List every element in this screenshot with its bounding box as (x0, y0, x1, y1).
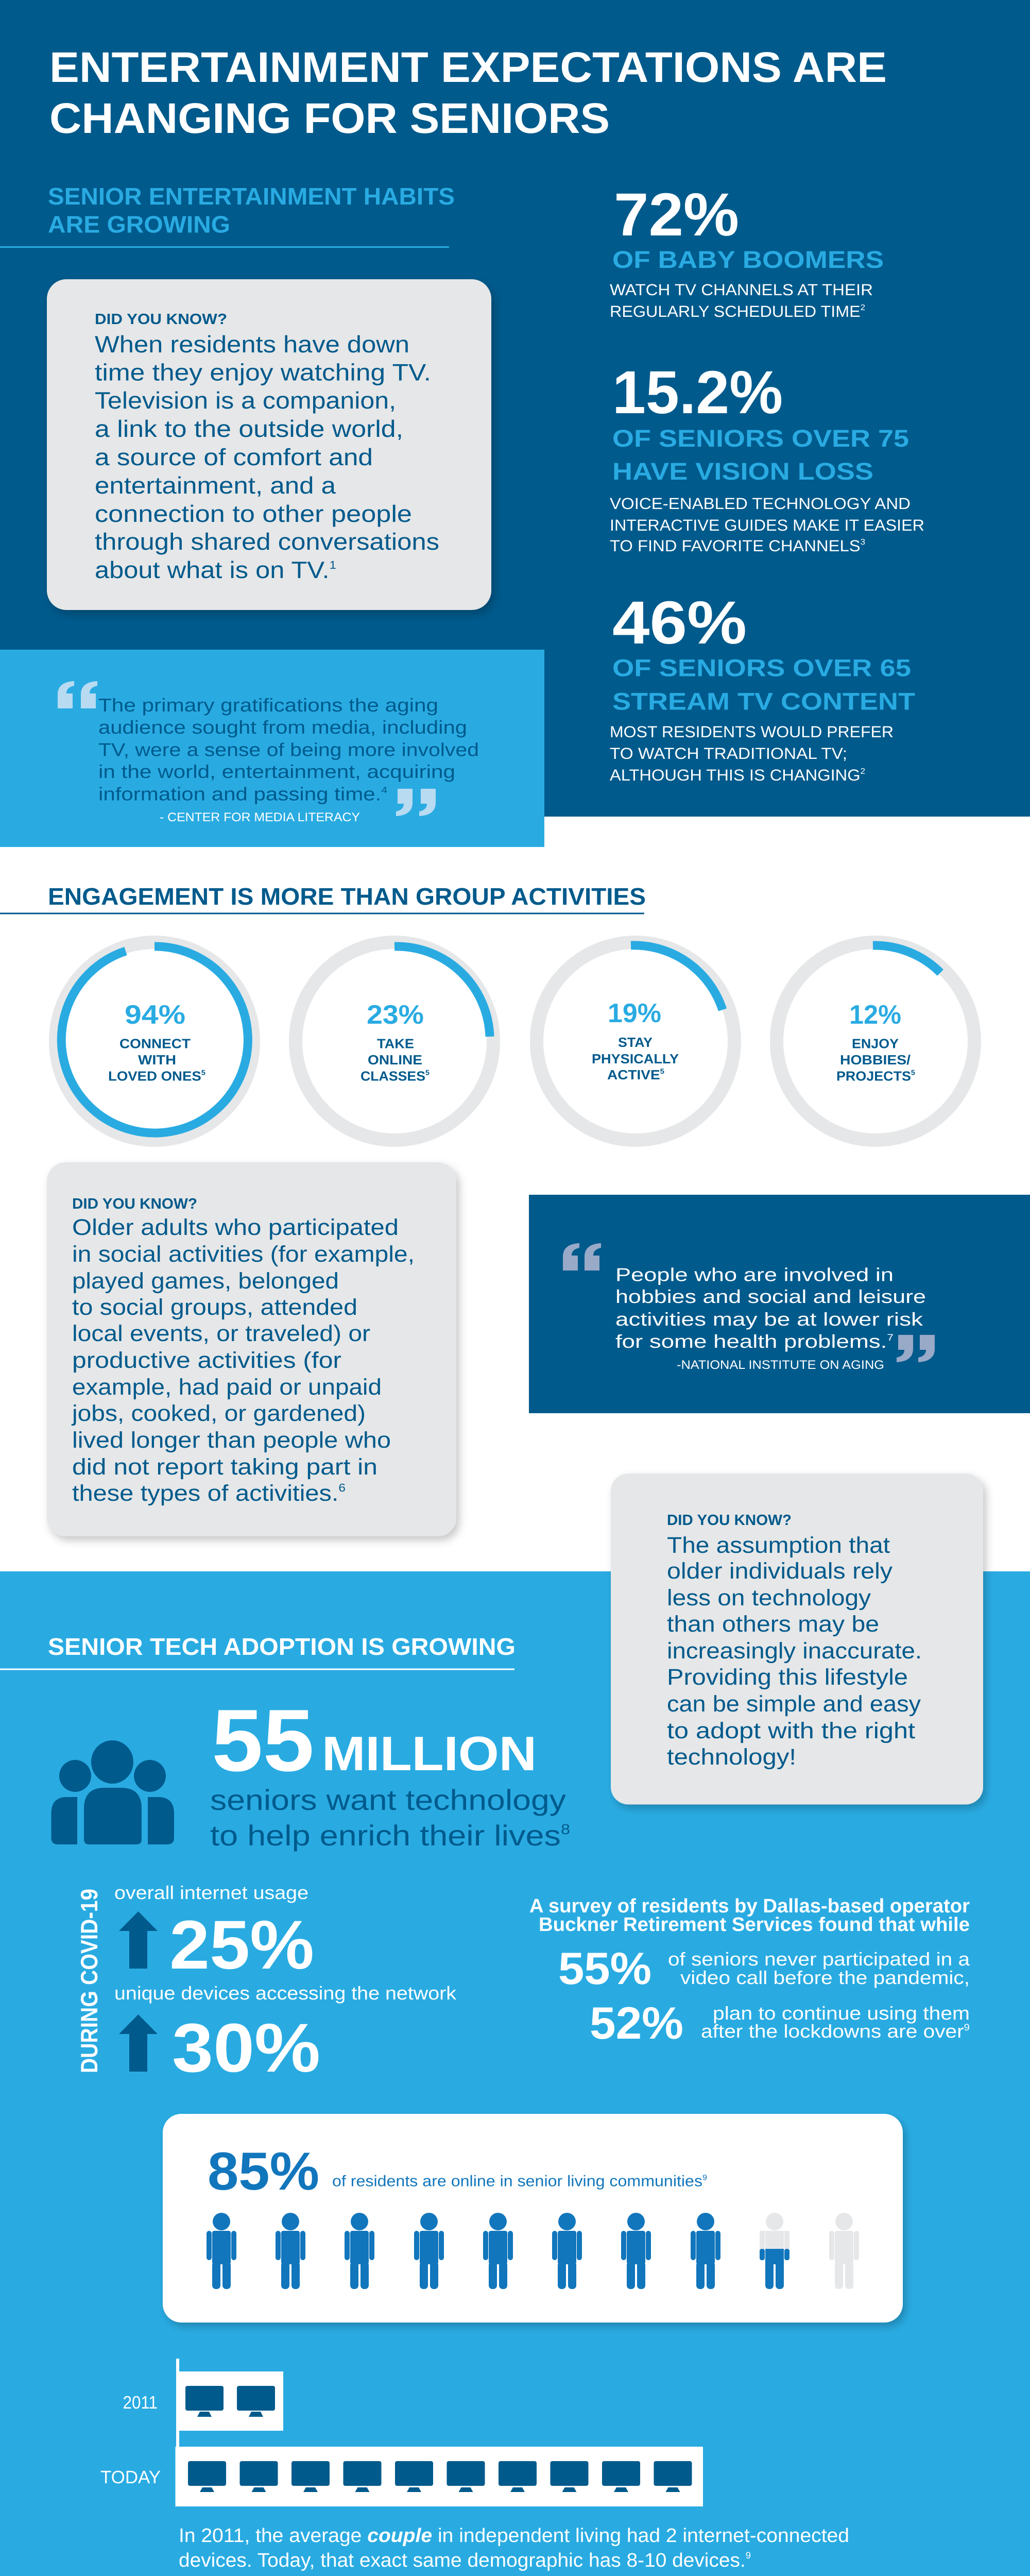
stat: 55 percent: 55% (558, 1943, 651, 1994)
card body text: older individuals rely (667, 1558, 892, 1584)
text block: buckner survey (529, 1895, 970, 2048)
stat: 52 percent: plan to continue using them (713, 2003, 970, 2024)
stat: 55 percent: video call before the pandemic, (680, 1967, 970, 1988)
quote text (98, 694, 479, 805)
stat: 15.2 percent: 3 (861, 538, 865, 547)
panel: did you know card 1 (47, 279, 491, 610)
icon: up arrow (119, 2014, 158, 2072)
card body text: time they enjoy watching TV. (95, 359, 431, 385)
chart: 94 percent ring: WITH (138, 1052, 176, 1067)
stat: 46 percent: STREAM TV CONTENT (612, 687, 915, 715)
quote text: information and passing time. (98, 784, 340, 805)
chart: 94 percent ring: CONNECT (119, 1036, 191, 1051)
chart: 19 percent ring: ACTIVE (607, 1067, 656, 1082)
quote attribution: - CENTER FOR MEDIA LITERACY (160, 810, 360, 824)
chart: 23 percent ring: TAKE (377, 1036, 414, 1051)
card body text: entertainment, and a (95, 472, 336, 499)
card body text: through shared conversations (95, 528, 439, 555)
icon: closing quote mark (396, 789, 436, 816)
stat: 55 million: MILLION (322, 1726, 537, 1781)
chart: devices per couple (100, 2359, 849, 2571)
quote text: hobbies and social and leisure (615, 1286, 926, 1307)
chart: 19 percent ring: 19% (608, 998, 661, 1028)
heading: senior tech adoption: SENIOR TECH ADOPTION IS GROWING (48, 1633, 516, 1660)
chart: 23 percent ring: 5 (425, 1069, 430, 1077)
chart caption: 9 (746, 2550, 751, 2561)
stat: internet usage up 25 percent: 25% (169, 1907, 314, 1984)
chart: 94 percent ring: LOVED ONES (108, 1069, 196, 1084)
card body text: played games, belonged (72, 1268, 339, 1294)
card body text: example, had paid or unpaid (72, 1375, 382, 1400)
card body text: Providing this lifestyle (667, 1665, 908, 1690)
card body text: technology! (667, 1744, 796, 1770)
bar: today: TODAY (100, 2467, 161, 2487)
stat: 46 percent: TO WATCH TRADITIONAL TV; (610, 744, 847, 762)
bar: 2011: 2011 (123, 2393, 158, 2413)
stat: 55 million: to help enrich their lives (210, 1819, 513, 1852)
quote text (615, 1264, 926, 1352)
card body text: a source of comfort and (95, 444, 373, 470)
chart caption (179, 2525, 849, 2571)
stat: 55 million (210, 1691, 570, 1852)
icon: up arrow (119, 1911, 158, 1969)
panel: 85 percent online card (163, 2114, 903, 2323)
stat: 72 percent: 72% (614, 181, 739, 249)
panel: national institute on aging quote (529, 1195, 1030, 1413)
card body text: Older adults who participated (72, 1215, 399, 1240)
stat: 55 million: 55 (212, 1691, 314, 1790)
stat caption: 9 (702, 2174, 707, 2182)
chart: 19 percent ring (537, 942, 734, 1140)
icon: opening quote mark (563, 1243, 601, 1270)
heading: senior entertainment habits: SENIOR ENTERTAINMENT HABITS (48, 183, 455, 210)
stat: 15.2 percent: 15.2% (612, 359, 783, 427)
icon: monitors (185, 2386, 275, 2417)
quote text: 7 (887, 1332, 894, 1343)
card body text (95, 331, 439, 583)
card body text: local events, or traveled) or (72, 1321, 370, 1346)
card label: DID YOU KNOW? (95, 311, 227, 328)
quote text: audience sought from media, including (98, 717, 467, 738)
card body text: than others may be (667, 1612, 879, 1637)
card body text: Television is a companion, (95, 387, 396, 414)
chart: 19 percent ring: PHYSICALLY (592, 1051, 679, 1066)
title: ENTERTAINMENT EXPECTATIONS ARE (49, 43, 887, 91)
stat: 72 percent: WATCH TV CHANNELS AT THEIR (610, 281, 873, 299)
stat: 55 million: seniors want technology (210, 1784, 566, 1816)
stat: 72 percent: OF BABY BOOMERS (612, 246, 884, 273)
icon: closing quote mark (897, 1335, 935, 1362)
card body text: did not report taking part in (72, 1454, 377, 1480)
icon: group of people (52, 1740, 174, 1844)
stat: 46 percent: MOST RESIDENTS WOULD PREFER (610, 723, 894, 741)
quote text: People who are involved in (615, 1264, 894, 1285)
card body text: increasingly inaccurate. (667, 1638, 922, 1664)
card body text: these types of activities. (72, 1481, 313, 1506)
chart: 23 percent ring: 23% (367, 1000, 424, 1030)
card label: DID YOU KNOW? (667, 1512, 792, 1529)
heading: senior entertainment habits (0, 183, 455, 248)
card body text: to adopt with the right (667, 1718, 915, 1743)
title (49, 43, 887, 142)
card body text (71, 1215, 415, 1506)
card body text: connection to other people (95, 500, 412, 527)
card body text: less on technology (667, 1585, 871, 1611)
stat: 15.2 percent: VOICE-ENABLED TECHNOLOGY AND (610, 495, 911, 513)
icon: opening quote mark (58, 681, 97, 708)
stat: 15.2 percent: INTERACTIVE GUIDES MAKE IT EASIER (610, 516, 924, 534)
card body text: jobs, cooked, or gardened) (71, 1401, 366, 1426)
panel: header and habits section (0, 0, 1030, 817)
panel: did you know card 3 (611, 1473, 983, 1804)
text block: buckner survey: Buckner Retirement Services found that while (539, 1914, 970, 1936)
card label: DID YOU KNOW? (72, 1196, 197, 1212)
card body text (667, 1533, 922, 1770)
chart: 19 percent ring: STAY (618, 1035, 653, 1050)
chart: 94 percent ring: 94% (125, 1000, 185, 1030)
panel: media literacy quote (0, 650, 544, 847)
stat: devices up 30 percent: 30% (172, 2010, 320, 2087)
heading: senior entertainment habits: ARE GROWING (48, 211, 230, 238)
stat: 55 percent (558, 1943, 970, 1994)
stat: 15.2 percent: OF SENIORS OVER 75 (612, 425, 909, 452)
chart caption: devices. Today, that exact same demographic has 8-10 devices. (179, 2550, 733, 2571)
chart: 94 percent ring (56, 942, 253, 1140)
chart: 12 percent ring: 5 (911, 1069, 915, 1077)
panel: did you know card 2 (47, 1162, 456, 1536)
card body text: productive activities (for (72, 1348, 341, 1373)
bar: 2011 (123, 2371, 283, 2431)
label: during covid-19: DURING COVID-19 (76, 1889, 102, 2073)
stat: 46 percent: 2 (861, 767, 865, 776)
stat: devices up 30 percent (114, 1982, 457, 2087)
card body text: When residents have down (95, 331, 409, 358)
chart: 12 percent ring: PROJECTS (836, 1069, 908, 1084)
stat: internet usage up 25 percent (114, 1882, 314, 1984)
stat: 72 percent: 2 (861, 303, 865, 312)
chart: 23 percent ring: CLASSES (360, 1069, 424, 1084)
quote text: 4 (381, 785, 387, 795)
quote text: in the world, entertainment, acquiring (98, 761, 455, 782)
stat: 46 percent: OF SENIORS OVER 65 (612, 654, 911, 681)
stat: 55 percent: of seniors never participated in a (668, 1948, 970, 1970)
chart: 12 percent ring (777, 942, 974, 1140)
stat: 52 percent: after the lockdowns are over (701, 2021, 934, 2042)
heading: engagement: ENGAGEMENT IS MORE THAN GROUP ACTIVITIES (48, 883, 646, 910)
stat: 46 percent: ALTHOUGH THIS IS CHANGING (610, 766, 848, 784)
chart: 19 percent ring: 5 (660, 1067, 664, 1075)
card body text: a link to the outside world, (95, 415, 403, 442)
chart: 94 percent ring: 5 (201, 1069, 205, 1077)
stat: 72 percent (610, 181, 884, 320)
title: CHANGING FOR SENIORS (49, 94, 610, 142)
stat: 52 percent: 9 (964, 2022, 970, 2032)
stat: 85 percent: 85% (208, 2142, 319, 2201)
pictogram: ten people (207, 2213, 859, 2289)
quote text: activities may be at lower risk (615, 1309, 923, 1330)
card body text: can be simple and easy (667, 1691, 921, 1717)
text block: buckner survey: A survey of residents by Dallas-based operator (529, 1895, 970, 1917)
chart: 23 percent ring: ONLINE (368, 1052, 422, 1067)
chart: 12 percent ring: 12% (849, 1000, 901, 1030)
panel: tech adoption section background (0, 1571, 1030, 2576)
stat: devices up 30 percent: unique devices accessing the network (114, 1982, 457, 2004)
bar: today (100, 2447, 703, 2506)
stat: 46 percent: 46% (612, 589, 747, 657)
card body text: 1 (330, 558, 336, 571)
stat: 15.2 percent: TO FIND FAVORITE CHANNELS (610, 537, 847, 555)
stat: 15.2 percent (610, 359, 924, 555)
quote text: for some health problems. (615, 1331, 830, 1352)
quote attribution: -NATIONAL INSTITUTE ON AGING (677, 1358, 884, 1372)
stat: 52 percent (590, 1997, 970, 2048)
card body text: 6 (338, 1481, 346, 1494)
heading: senior tech adoption (0, 1633, 516, 1670)
stat: 46 percent (610, 589, 915, 784)
stat: internet usage up 25 percent: overall internet usage (114, 1882, 308, 1903)
card body text: about what is on TV. (95, 556, 308, 583)
stat: 15.2 percent: HAVE VISION LOSS (612, 457, 873, 485)
icon: monitors (188, 2461, 692, 2492)
chart caption: In 2011, the average couple in independent living had 2 internet-connected (179, 2525, 849, 2547)
chart: 12 percent ring: ENJOY (852, 1036, 899, 1051)
card body text: in social activities (for example, (72, 1242, 415, 1267)
quote text: The primary gratifications the aging (98, 694, 438, 716)
chart: 12 percent ring: HOBBIES/ (840, 1052, 911, 1067)
card body text: lived longer than people who (72, 1428, 391, 1453)
stat caption: of residents are online in senior living communities (332, 2173, 677, 2190)
stat: 72 percent: REGULARLY SCHEDULED TIME (610, 302, 850, 320)
card body text: to social groups, attended (72, 1295, 357, 1320)
card body text: The assumption that (667, 1533, 890, 1558)
stat: 52 percent: 52% (590, 1997, 683, 2048)
quote text: TV, were a sense of being more involved (98, 739, 479, 760)
chart: 23 percent ring (296, 942, 493, 1140)
stat: 55 million: 8 (561, 1821, 570, 1837)
